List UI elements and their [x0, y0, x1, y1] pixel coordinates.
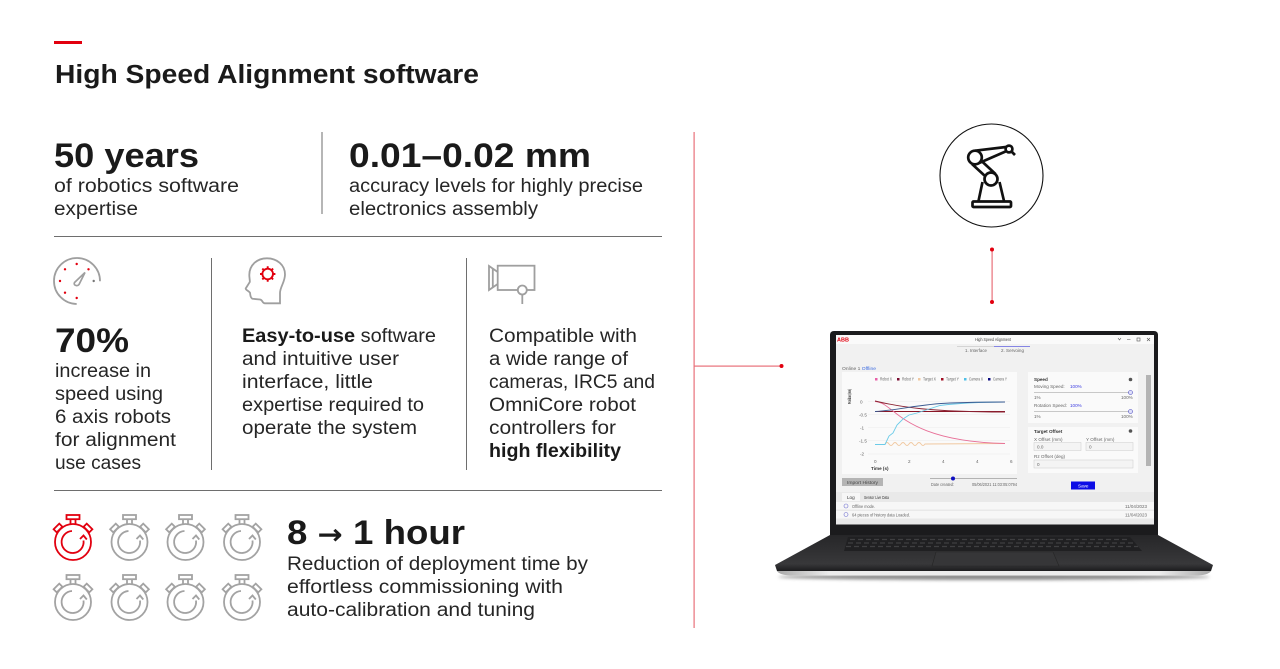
panel: ease of use: Easy-to-use software: [242, 326, 436, 347]
accent bar: [54, 41, 82, 44]
speed panel: 100%: [1121, 395, 1133, 400]
stat: deployment time: Reduction of deployment time by: [287, 554, 589, 575]
stat: accuracy: [349, 137, 643, 220]
target offset panel: 0: [1089, 444, 1092, 450]
stat: 50 years: expertise: [54, 199, 138, 220]
title: High Speed Alignment software: [55, 61, 479, 89]
panel: compatibility: Compatible with: [489, 326, 637, 347]
chart panel: Camera X: [969, 376, 983, 382]
chart panel: 4: [942, 459, 945, 464]
application window: [836, 335, 1154, 524]
panel: speed: for alignment: [55, 430, 177, 451]
chart panel: Target Y: [946, 376, 959, 382]
icon: robot arm in circle: [940, 124, 1043, 227]
panel: compatibility: a wide range of: [489, 349, 629, 370]
log panel: Offline mode.: [852, 504, 875, 509]
target offset panel: Target Offset: [1034, 429, 1063, 434]
chart panel: -0.5: [859, 412, 867, 418]
laptop base: [775, 535, 1213, 576]
scrollbar: [1146, 375, 1151, 466]
laptop shadow: [778, 574, 1210, 580]
stat: 50 years: [54, 137, 239, 220]
icon: stopwatches: [54, 515, 261, 620]
connector: robot to laptop: [990, 248, 994, 304]
chart panel: [842, 372, 1017, 474]
icon: speedometer: [54, 258, 100, 304]
speed panel: [1028, 372, 1138, 423]
tabs: 2. Servoing: [1001, 348, 1024, 353]
laptop: [775, 331, 1213, 580]
speed panel: 100%: [1070, 384, 1082, 389]
panel: speed: 70%: [55, 322, 129, 360]
stat: deployment time: auto-calibration and tuning: [287, 600, 535, 621]
history slider: [930, 476, 1017, 487]
stat: 50 years: 50 years: [54, 137, 199, 175]
history slider: 05/06/2021 11:03:05:0794: [972, 482, 1017, 487]
chart panel: 4: [976, 459, 979, 464]
panel: speed: 6 axis robots: [55, 407, 171, 428]
speed panel: Moving Speed:: [1034, 384, 1065, 389]
chart panel: Target X: [923, 376, 936, 382]
speed panel: 100%: [1070, 403, 1082, 408]
chart panel: -2: [860, 452, 865, 456]
stat: accuracy: electronics assembly: [349, 199, 539, 220]
target offset panel: X Offset (mm): [1034, 437, 1063, 442]
target offset panel: Y Offset (mm): [1086, 437, 1115, 442]
tabs: [957, 346, 1030, 353]
log panel: [836, 492, 1154, 524]
chart panel: 6: [1010, 459, 1013, 464]
icon: head with gear: [246, 258, 285, 303]
target offset panel: [1028, 427, 1138, 473]
import history button: [842, 478, 883, 486]
target offset panel: Rz Offset (deg): [1034, 454, 1066, 459]
chart panel: Position (mm): [847, 389, 852, 404]
panel: ease of use: operate the system: [242, 418, 417, 439]
panel: speed: speed using: [55, 384, 163, 405]
panel: ease of use: and intuitive user: [242, 349, 400, 370]
import history button: Import History: [847, 480, 879, 485]
panel: compatibility: cameras, IRC5 and: [489, 372, 655, 393]
tabs: 1. Interface: [965, 348, 987, 353]
panel: speed: use cases: [55, 453, 141, 474]
red connector: column divider and laptop link: [694, 132, 784, 628]
stat: 50 years: of robotics software: [54, 176, 239, 197]
speed panel: 1%: [1034, 414, 1041, 419]
panel: compatibility: controllers for: [489, 418, 617, 439]
speed panel: Rotation Speed:: [1034, 403, 1067, 408]
save button: [1071, 482, 1095, 490]
title bar: High Speed Alignment: [975, 337, 1012, 342]
log panel: 11/04/2023: [1125, 512, 1147, 517]
chart panel: 2: [908, 459, 911, 464]
panel: speed: [54, 258, 177, 474]
chart panel: Camera Y: [993, 376, 1007, 382]
chart panel: 0: [874, 459, 877, 464]
title bar: [836, 335, 1154, 344]
log panel: 11/04/2023: [1125, 504, 1147, 509]
stat: deployment time: [287, 514, 589, 621]
chart panel: -1.5: [859, 438, 867, 444]
history slider: Date created:: [931, 482, 954, 487]
chart panel: Robot X: [880, 376, 892, 382]
log panel: Log: [847, 495, 855, 500]
stat: deployment time: effortless commissioning with: [287, 577, 563, 598]
chart panel: -1: [860, 426, 865, 430]
panel: ease of use: expertise required to: [242, 395, 424, 416]
panel: ease of use: interface, little: [242, 372, 373, 393]
stat: accuracy: accuracy levels for highly precise: [349, 176, 643, 197]
panel: compatibility: OmniCore robot: [489, 395, 637, 416]
panel: compatibility: high flexibility: [489, 441, 621, 462]
panel: speed: increase in: [55, 361, 151, 382]
panel: compatibility: [489, 266, 655, 462]
speed panel: Speed: [1034, 377, 1048, 382]
laptop screen bezel: [830, 331, 1158, 535]
target offset panel: 0: [1037, 462, 1040, 467]
target offset panel: 0.0: [1037, 444, 1044, 450]
chart panel: Robot Y: [902, 376, 914, 382]
speed panel: 100%: [1121, 414, 1133, 419]
stat: deployment time: 8 → 1 hour: [287, 514, 465, 552]
log panel: Sensor Live Data: [864, 495, 889, 500]
panel: ease of use: [242, 258, 436, 439]
icon: camera: [489, 266, 534, 304]
title bar: ABB: [837, 338, 849, 344]
save button: Save: [1078, 483, 1089, 488]
speed panel: 1%: [1034, 395, 1041, 400]
stat: accuracy: 0.01–0.02 mm: [349, 137, 591, 175]
log panel: 64 pieces of history data Loaded.: [852, 512, 910, 517]
chart panel: Time (s): [871, 466, 889, 471]
online status: Online 1 Offline: [842, 366, 876, 371]
chart panel: 0: [860, 400, 863, 404]
